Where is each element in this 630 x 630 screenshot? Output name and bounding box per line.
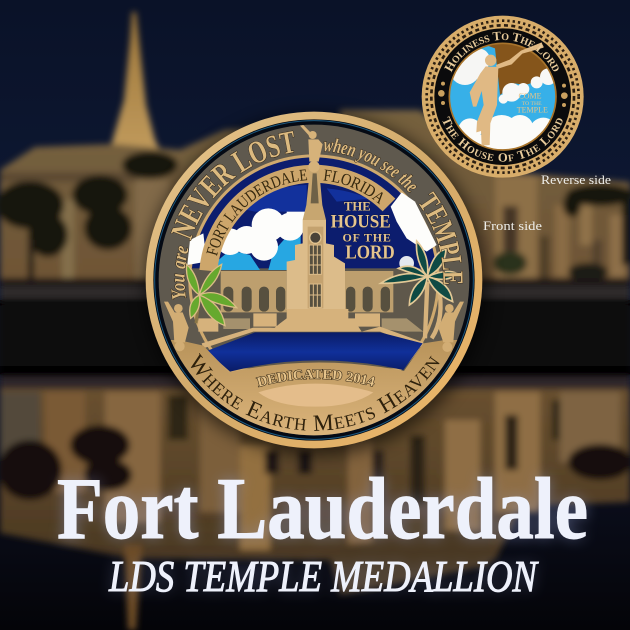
- reflected windows: [505, 415, 518, 470]
- text: The House of the Lord: THE: [344, 199, 371, 213]
- left wing of temple: [0, 125, 350, 285]
- white clouds right: [499, 68, 557, 104]
- pewter text band: [159, 125, 469, 435]
- text: Come to the Temple: TO THE: [522, 101, 542, 107]
- pool walls: [202, 327, 423, 348]
- text: You are Never Lost when you see the Temple: [170, 130, 464, 300]
- brown upper sky: [488, 44, 547, 95]
- green palm: [186, 264, 237, 326]
- text: You are Never Lost when you see the Temple: TEMPLE: [418, 190, 464, 284]
- text: The House of the Lord: [331, 199, 395, 263]
- inner gold ring: [188, 154, 440, 406]
- text: Fort Lauderdale Florida: FORT LAUDERDALE: [206, 169, 308, 256]
- dark palm and bushes on right: [563, 184, 630, 265]
- blue reflecting pool: [207, 332, 423, 372]
- text: The House of the Lord: HOUSE: [331, 212, 391, 233]
- subtitle: LDS TEMPLE MEDALLION: [108, 552, 539, 601]
- medallion drop shadow: [144, 112, 488, 456]
- dark bank: [0, 299, 630, 306]
- front side medallion: [146, 112, 482, 448]
- dark palms on left: [0, 151, 178, 257]
- black inner ring: [153, 119, 475, 441]
- angel with trumpet: [470, 42, 544, 146]
- teal palm: [381, 241, 457, 338]
- lighter cyan sky patches: [217, 233, 301, 270]
- gold band behind Fort Lauderdale Florida: [208, 174, 389, 271]
- subtitle glow: LDS TEMPLE MEDALLION: [108, 552, 539, 601]
- temple wings: [221, 271, 393, 312]
- text: You are Never Lost when you see the Temple: NEVER LOST: [170, 130, 294, 242]
- inner scene: [450, 44, 556, 150]
- tower shading: [308, 227, 323, 308]
- reverse side medallion: [422, 16, 584, 178]
- text: Holiness to the Lord: HOLINESS TO THE LORD: [444, 32, 559, 72]
- water and sky reflection: [0, 375, 630, 630]
- text: You are Never Lost when you see the Temple: You are: [170, 246, 189, 300]
- left pilgrim figure: [164, 302, 189, 351]
- right wing of temple: [340, 110, 630, 285]
- ornamental ring: [427, 21, 579, 173]
- plaza steps: [198, 309, 380, 332]
- temple central tower: [287, 220, 345, 310]
- text: Come to the Temple: TEMPLE: [517, 105, 548, 114]
- reflected temple: [0, 389, 630, 592]
- white clouds bottom: [459, 115, 550, 150]
- text: Fort Lauderdale Florida: FLORIDA: [323, 170, 383, 204]
- inner gold hairline: [449, 43, 556, 150]
- temple spire: [110, 12, 160, 150]
- wing arches: [223, 287, 390, 312]
- white clouds right: [391, 192, 437, 271]
- tower windows: [309, 245, 321, 307]
- text: Come to the Temple: COME: [518, 91, 542, 100]
- blue enamel sky: [192, 158, 436, 272]
- clock circle: [310, 232, 321, 243]
- side dots: [438, 82, 568, 107]
- gold lower crescent: [170, 340, 458, 436]
- text: The House of the Lord: THE HOUSE OF THE LORD: [442, 116, 562, 162]
- white clouds top left: [453, 48, 489, 85]
- text: Come to the Temple: [517, 91, 548, 114]
- night sky: [0, 0, 630, 300]
- text: The House of the Lord: OF THE: [342, 231, 391, 245]
- label: reverse side: Reverse side: [541, 173, 611, 187]
- text: Where Earth Meets Heaven: WHERE EARTH MEETS HEAVEN: [190, 353, 440, 431]
- blue sky: [450, 46, 556, 135]
- reflected spire: [124, 545, 142, 630]
- angel Moroni on spire: [300, 125, 323, 172]
- spire tip: [303, 168, 326, 220]
- upper ledge: [0, 278, 630, 286]
- outer gold rim: [422, 16, 584, 178]
- text: Dedicated 2014: DEDICATED 2014: [256, 369, 376, 388]
- label: front side: Front side: [483, 219, 543, 233]
- reflected temple steps: [340, 530, 490, 595]
- lower ledge reflection: [0, 377, 630, 389]
- text: You are Never Lost when you see the Temple: when you see the: [324, 138, 416, 192]
- white clouds left: [187, 208, 306, 265]
- gold rim: [146, 112, 482, 448]
- text: The House of the Lord: LORD: [345, 241, 395, 263]
- light medallion dish: [258, 384, 373, 407]
- lighter blue swirl at top: [247, 185, 368, 212]
- text: Fort Lauderdale Florida: [206, 169, 383, 256]
- right pilgrim figure: [438, 302, 464, 352]
- black text ring: [434, 28, 571, 165]
- reflected palms: [0, 425, 630, 500]
